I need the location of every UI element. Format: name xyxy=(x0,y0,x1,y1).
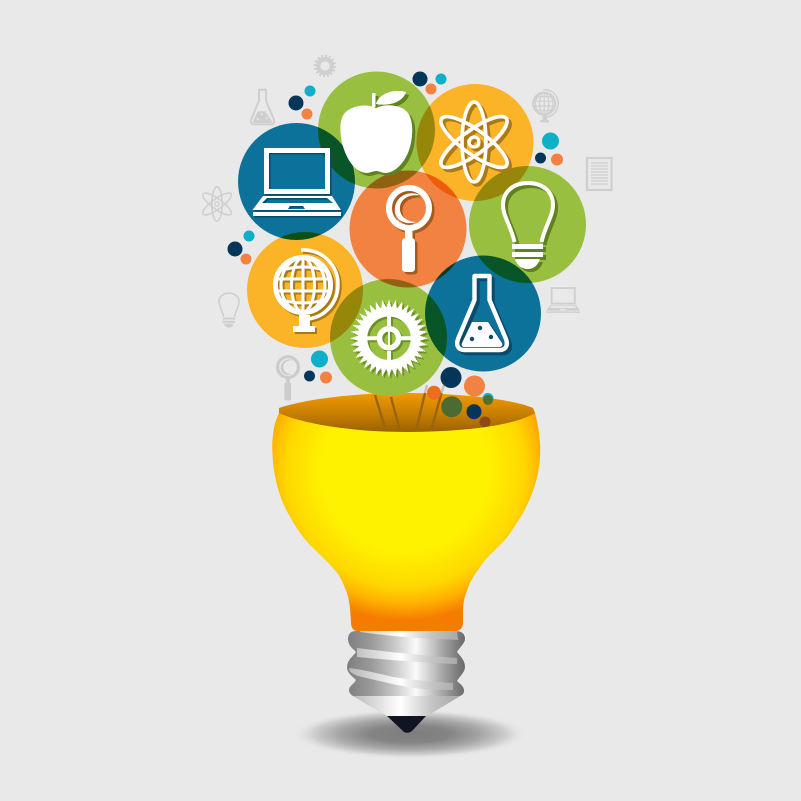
filaments xyxy=(375,385,444,431)
icon: light bulb xyxy=(503,183,556,272)
circle: gear green xyxy=(330,279,447,396)
grey icon: flask xyxy=(251,90,274,124)
grey icon: light bulb xyxy=(219,293,239,328)
icon: gear xyxy=(352,301,428,377)
dot cluster: left xyxy=(228,230,254,264)
circle: magnifier orange xyxy=(350,170,466,288)
icon: magnifier xyxy=(389,188,432,274)
thread highlight stripes xyxy=(349,631,460,716)
circle: flask blue xyxy=(425,256,541,372)
bulb ground shadow xyxy=(292,709,528,759)
circle: laptop blue xyxy=(238,123,355,240)
decorative dot clusters xyxy=(228,72,563,384)
dot cluster: upper left xyxy=(288,86,316,120)
circle: globe yellow xyxy=(247,232,363,348)
icon: apple xyxy=(340,91,415,176)
circle: bulb green xyxy=(469,166,586,283)
screw base tip xyxy=(387,716,426,733)
screw base body xyxy=(347,631,465,716)
overlapping coloured circles xyxy=(238,72,586,396)
grey icon: laptop xyxy=(546,287,580,313)
bulb glass body xyxy=(272,413,540,631)
circle: atom yellow xyxy=(416,84,534,201)
small grey icons xyxy=(200,56,612,400)
dots falling into bulb xyxy=(427,367,494,428)
light bulb xyxy=(272,367,540,733)
dot cluster: lower left xyxy=(304,350,332,384)
bulb opening interior xyxy=(279,393,535,433)
dot cluster: top xyxy=(412,72,446,94)
grey icon: atom xyxy=(200,187,234,221)
dot cluster: right xyxy=(535,132,563,166)
icon: atom xyxy=(435,102,516,185)
circle: apple green xyxy=(318,72,435,188)
icon: flask xyxy=(457,276,510,353)
metal screw base xyxy=(347,631,465,716)
white icons in circles xyxy=(252,91,556,377)
icon: laptop xyxy=(252,148,342,218)
grey icon: magnifier xyxy=(278,357,298,400)
icon: globe xyxy=(276,250,340,334)
grey icon: globe xyxy=(533,90,558,122)
grey icon: gear xyxy=(315,56,335,76)
grey icon: document xyxy=(587,158,612,190)
